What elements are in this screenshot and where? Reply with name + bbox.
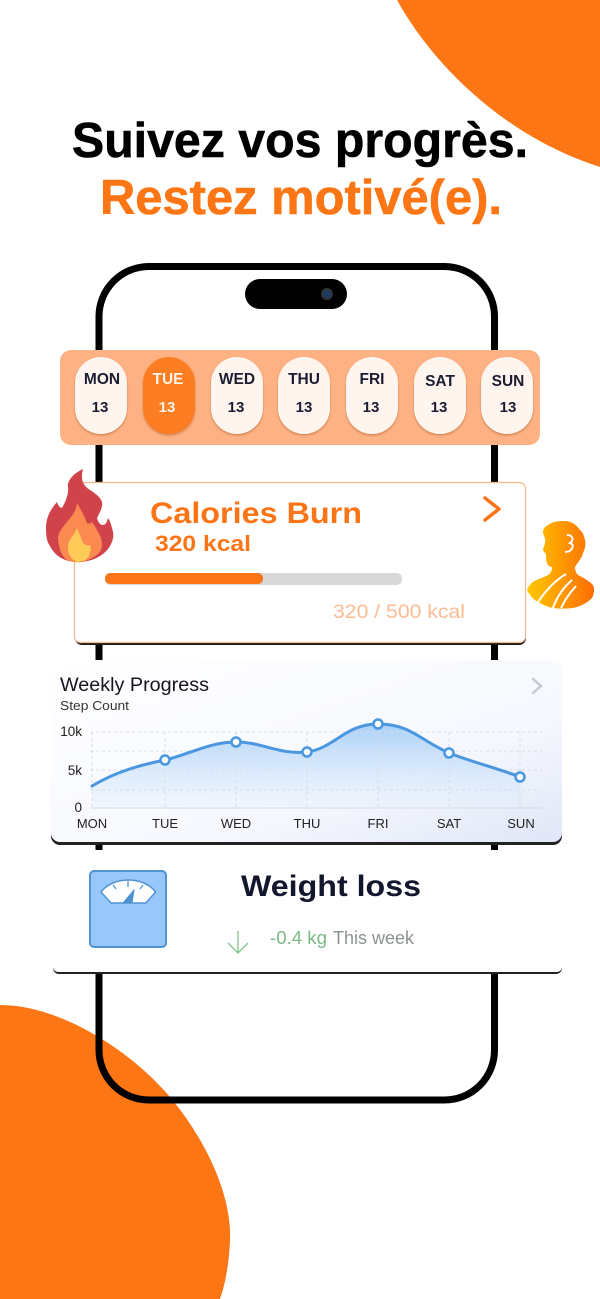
- panel: day selector: [60, 350, 540, 445]
- day pill: Saturday: [414, 357, 466, 434]
- line chart: 5k: [68, 763, 82, 778]
- line chart: [60, 720, 542, 831]
- line chart: TUE: [152, 816, 178, 831]
- title: [72, 114, 528, 225]
- day pill: Tuesday selected: 13: [159, 399, 175, 416]
- heading: calories burn: Calories Burn: [150, 497, 362, 530]
- panel: weight loss: [53, 850, 562, 974]
- icon: grey chevron: [533, 679, 541, 693]
- progress bar: [105, 573, 402, 585]
- day pill: Sunday: [481, 357, 533, 434]
- panel: weekly progress: [51, 660, 562, 845]
- phone camera: [322, 289, 332, 299]
- day pill: Saturday: 13: [431, 399, 447, 416]
- day pill: Wednesday: [211, 357, 263, 434]
- day pill: Wednesday: WED: [219, 371, 255, 388]
- day pill: Friday: 13: [363, 399, 379, 416]
- calories value: 320 kcal: [155, 531, 251, 556]
- line chart: 10k: [60, 724, 82, 739]
- icon: chevron: [485, 498, 499, 520]
- line chart: 0: [74, 800, 82, 815]
- icon: flame: [46, 469, 113, 562]
- day pill: Monday: [75, 357, 127, 434]
- weight change: This week: [333, 928, 415, 948]
- calories progress label: 320 / 500 kcal: [333, 602, 465, 623]
- day pill: Sunday: SUN: [492, 373, 524, 390]
- subheading: step count: Step Count: [60, 699, 130, 713]
- day pill: Sunday: 13: [500, 399, 516, 416]
- phone notch: [245, 279, 347, 309]
- day pill: Monday: 13: [92, 399, 108, 416]
- phone frame: [99, 266, 494, 1100]
- title: Suivez vos progrès.: [72, 114, 528, 168]
- day pill: Tuesday selected: [143, 357, 195, 434]
- icon: down arrow: [228, 931, 248, 953]
- decorative corner shape: top right: [397, 0, 600, 167]
- icon: bust statue: [527, 521, 594, 609]
- weight change: [270, 928, 415, 948]
- day pill: Saturday: SAT: [425, 373, 455, 390]
- icon: weighing scale: [90, 871, 166, 947]
- day pill: Thursday: 13: [296, 399, 312, 416]
- panel: calories burn: [74, 482, 526, 645]
- day pill: Monday: MON: [84, 371, 120, 388]
- day pill: Friday: [346, 357, 398, 434]
- line chart: WED: [221, 816, 251, 831]
- heading: weekly progress: Weekly Progress: [60, 675, 209, 696]
- day pill: Friday: FRI: [360, 371, 384, 388]
- weight change: -0.4 kg: [270, 928, 327, 948]
- line chart: SAT: [437, 816, 461, 831]
- title: Restez motivé(e).: [100, 171, 502, 225]
- day pill: Tuesday selected: TUE: [152, 371, 184, 388]
- day pill: Thursday: [278, 357, 330, 434]
- day pill: Wednesday: 13: [228, 399, 244, 416]
- decorative corner shape: bottom left: [0, 1005, 230, 1299]
- heading: weight loss: Weight loss: [241, 870, 421, 903]
- line chart: THU: [294, 816, 320, 831]
- line chart: FRI: [368, 816, 388, 831]
- line chart: SUN: [507, 816, 535, 831]
- day pill: Thursday: THU: [288, 371, 320, 388]
- line chart: MON: [77, 816, 107, 831]
